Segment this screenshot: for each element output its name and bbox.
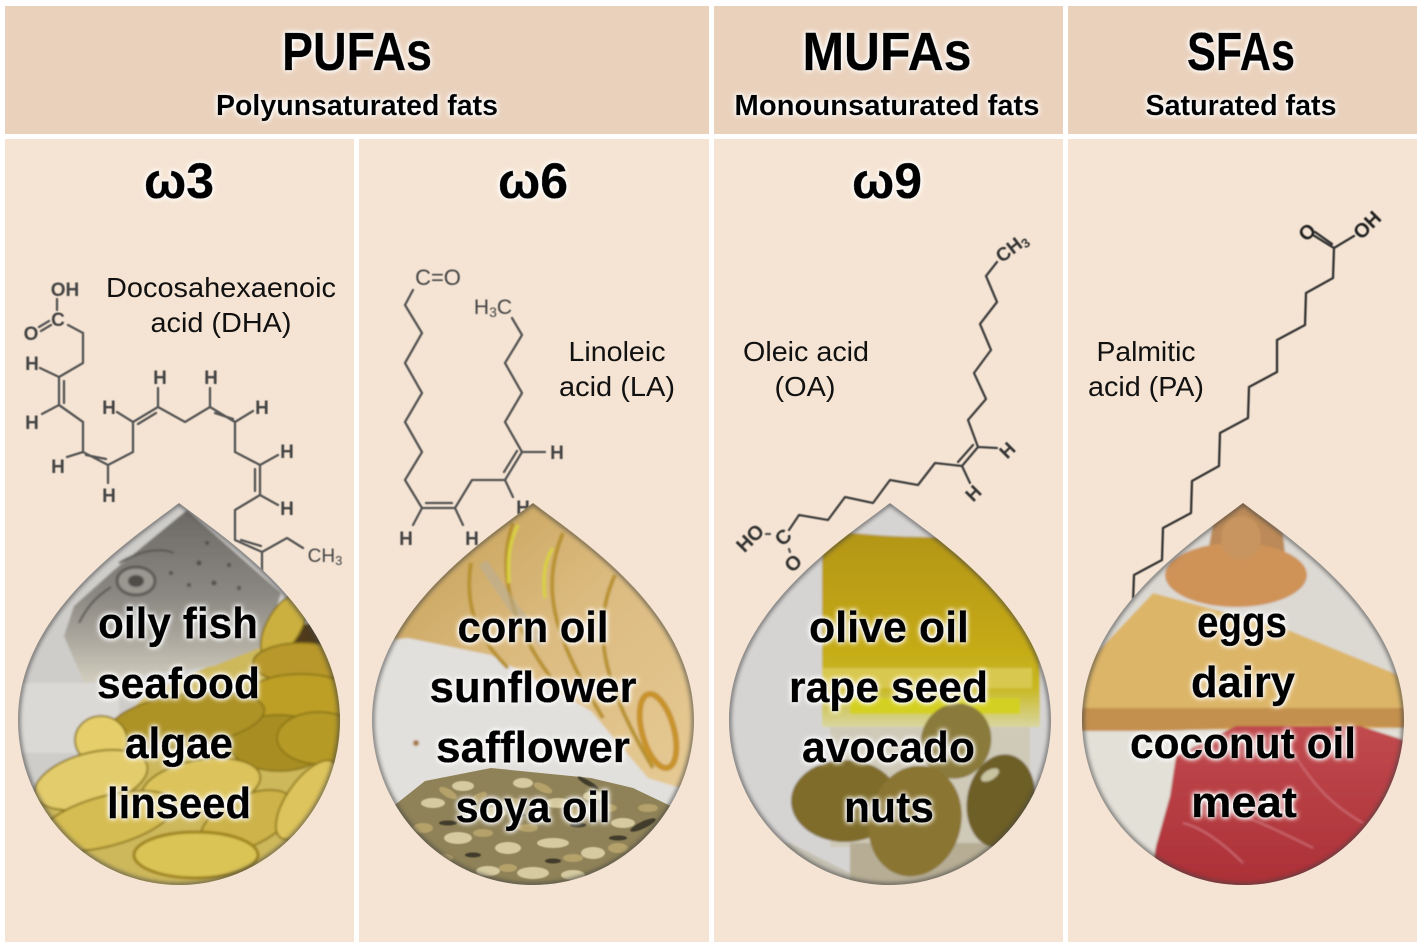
subheading: polyunsaturated fats: Polyunsaturated fats <box>216 90 498 122</box>
molecule: LA structure: H <box>516 498 530 519</box>
panel: omega 9 <box>714 139 1063 942</box>
molecule: DHA structure: H <box>25 413 39 434</box>
heading: SFAs: SFAs <box>1187 22 1295 82</box>
food list: saturated fats: coconut oil <box>1130 719 1356 768</box>
subheading: monounsaturated fats: Monounsaturated fats <box>734 90 1040 122</box>
molecule: DHA structure: OH <box>51 280 79 301</box>
label: LA: Linoleic <box>568 336 666 367</box>
panel: omega 6 <box>359 139 709 942</box>
food list: omega 6 <box>430 603 636 832</box>
molecule: OA structure: C <box>771 525 797 551</box>
molecule: DHA structure: H <box>51 457 65 478</box>
drop: omega 3 food sources <box>18 503 340 885</box>
food list: omega 3: seafood <box>97 659 260 708</box>
photo: oil bottle and seeds <box>372 503 694 806</box>
food list: omega 6: safflower <box>436 723 630 772</box>
molecule: DHA structure: O <box>24 324 38 345</box>
label: LA: acid (LA) <box>559 371 675 402</box>
heading: omega 6: ω6 <box>498 153 568 209</box>
food list: saturated fats: eggs <box>1197 598 1287 647</box>
molecule: LA structure <box>399 265 564 550</box>
food list: omega 3 <box>97 599 260 828</box>
food list: omega 9: olive oil <box>809 603 969 652</box>
molecule: DHA structure: 3 <box>335 553 342 568</box>
photo: olive oil and olives <box>720 503 1060 893</box>
molecule: PA structure: OH <box>1349 207 1386 244</box>
molecule: DHA structure: H <box>25 354 39 375</box>
label: OA: Oleic acid <box>743 336 869 367</box>
label: PA <box>1088 336 1204 402</box>
photo: egg, cheese and meat <box>1082 503 1404 885</box>
label: PA: acid (PA) <box>1088 371 1204 402</box>
heading: omega 9: ω9 <box>852 153 922 209</box>
label: DHA: Docosahexaenoic <box>106 272 336 303</box>
molecule: DHA structure: CH <box>308 546 335 567</box>
food list: saturated fats <box>1130 598 1356 827</box>
header panel: PUFAs <box>5 6 709 134</box>
food list: omega 6: soya oil <box>456 783 610 832</box>
drop: omega 9 food sources <box>720 503 1060 893</box>
drop: omega 6 food sources <box>363 498 703 893</box>
molecule: OA structure: HO <box>732 520 769 557</box>
molecule: DHA structure: H <box>153 368 167 389</box>
food list: omega 9 <box>789 603 988 832</box>
molecule: PA structure <box>1133 207 1386 602</box>
header panel: SFAs <box>1068 6 1417 134</box>
label: OA: (OA) <box>774 371 836 402</box>
drop: saturated fat food sources <box>1082 503 1404 885</box>
molecule: LA structure: H <box>550 443 564 464</box>
molecule: OA structure: H <box>996 439 1020 463</box>
molecule: DHA structure <box>24 280 342 577</box>
header panel: MUFAs <box>714 6 1063 134</box>
label: LA <box>559 336 675 402</box>
molecule: LA structure: C=O <box>415 265 461 290</box>
label: DHA: acid (DHA) <box>150 307 292 338</box>
molecule: DHA structure: C <box>51 310 65 331</box>
molecule: LA structure: H <box>474 296 489 319</box>
food list: omega 6: sunflower <box>430 663 636 712</box>
label: PA: Palmitic <box>1096 336 1196 367</box>
heading: PUFAs: PUFAs <box>282 22 432 82</box>
molecule: OA structure: O <box>780 550 807 577</box>
molecule: OA structure: 3 <box>1018 235 1033 251</box>
molecule: OA structure: H <box>962 482 986 506</box>
molecule: LA structure: H <box>399 529 413 550</box>
food list: omega 9: nuts <box>844 783 934 832</box>
label: DHA <box>106 272 336 338</box>
heading: omega 3: ω3 <box>144 153 214 209</box>
food list: omega 3: linseed <box>107 779 251 828</box>
molecule: DHA structure: H <box>102 486 116 507</box>
food list: omega 9: rape seed <box>789 663 988 712</box>
food list: omega 9: avocado <box>802 723 975 772</box>
molecule: OA structure <box>732 229 1033 577</box>
molecule: LA structure: C <box>497 296 512 319</box>
molecule: LA structure: H <box>465 529 479 550</box>
label: OA <box>743 336 869 402</box>
panel: omega 3 <box>5 139 361 942</box>
subheading: saturated fats: Saturated fats <box>1146 90 1336 122</box>
molecule: PA structure: O <box>1294 219 1321 246</box>
molecule: OA structure: CH <box>992 234 1027 267</box>
panel: saturated fats <box>1068 139 1417 942</box>
food list: saturated fats: meat <box>1191 778 1297 827</box>
food list: omega 3: algae <box>125 719 233 768</box>
molecule: DHA structure: H <box>102 398 116 419</box>
molecule: DHA structure: H <box>255 398 269 419</box>
molecule: DHA structure: H <box>280 499 294 520</box>
food list: saturated fats: dairy <box>1191 658 1296 707</box>
food list: omega 6: corn oil <box>458 603 608 652</box>
molecule: DHA structure: H <box>280 442 294 463</box>
food list: omega 3: oily fish <box>98 599 258 648</box>
heading: MUFAs: MUFAs <box>802 22 972 82</box>
photo: oily fish and capsules <box>18 503 340 885</box>
molecule: LA structure: 3 <box>489 304 497 320</box>
molecule: DHA structure: H <box>204 368 218 389</box>
